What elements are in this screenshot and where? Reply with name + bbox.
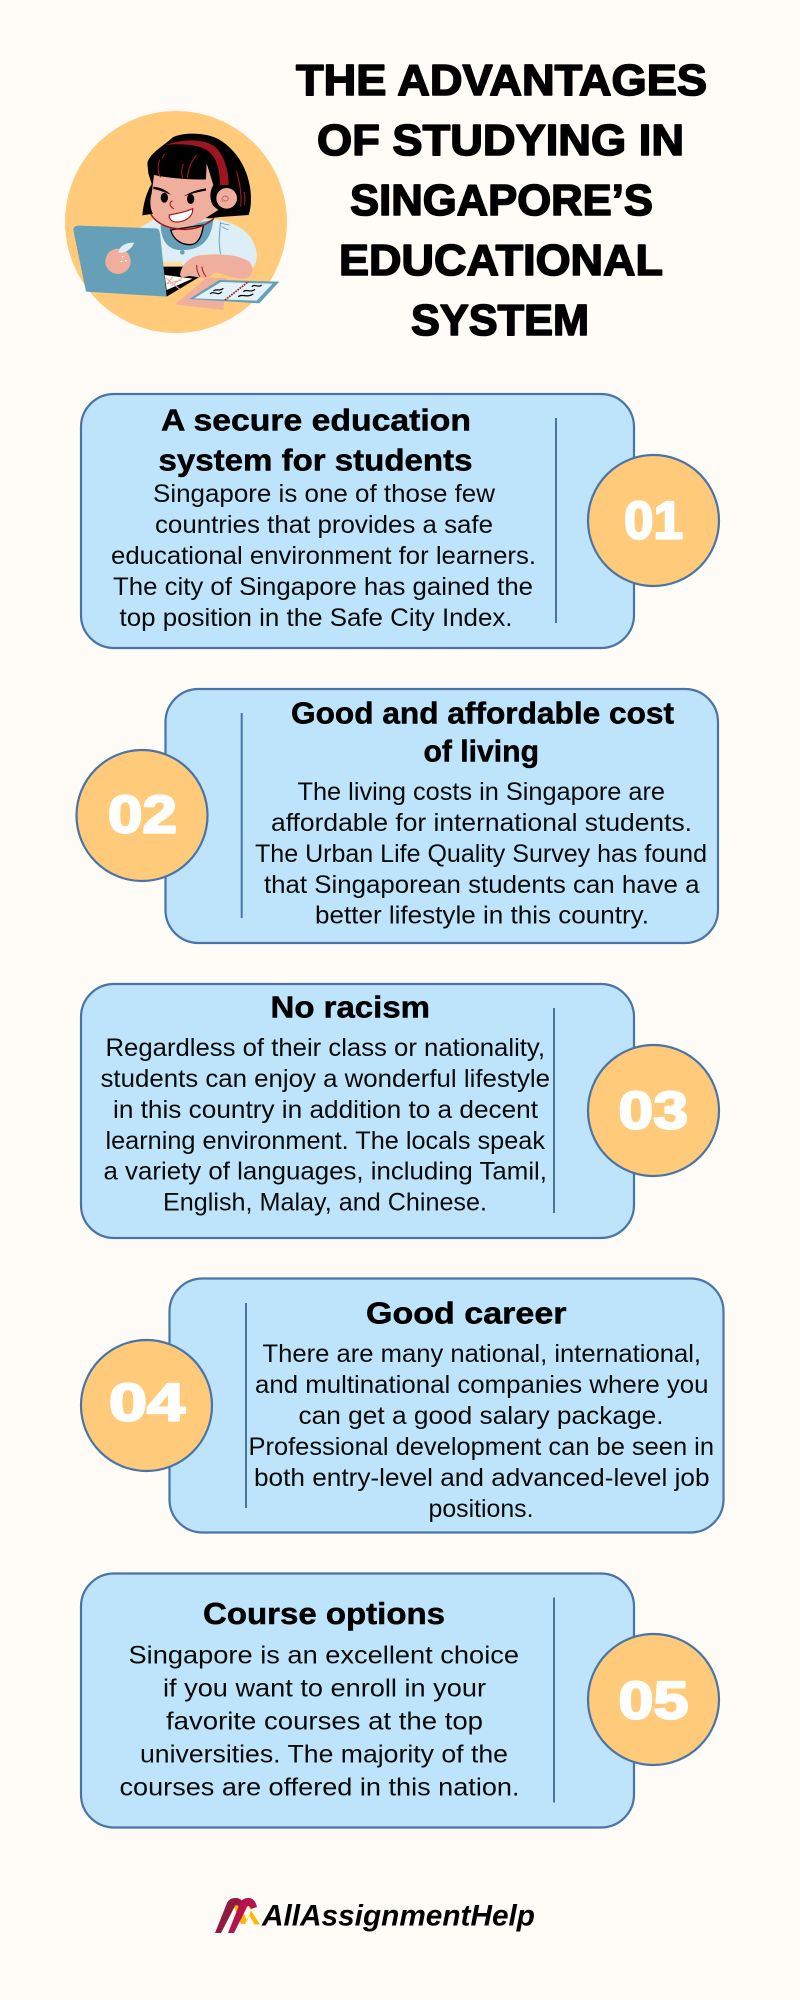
title: SYSTEM: [411, 296, 589, 345]
body text: better lifestyle in this country.: [315, 902, 649, 930]
number badge 04: 04: [109, 1374, 186, 1432]
body text: affordable for international students.: [271, 809, 692, 837]
divider line: [553, 1008, 555, 1213]
title: THE ADVANTAGES: [296, 56, 707, 105]
body text: students can enjoy a wonderful lifestyle: [100, 1065, 550, 1093]
panel: card 05: [81, 1574, 719, 1828]
body text: Professional development can be seen in: [248, 1433, 714, 1461]
logo: AllAssignmentHelp: [215, 1898, 535, 1933]
divider line: [245, 1303, 247, 1508]
body text: Singapore is one of those few: [153, 480, 496, 508]
icon: student and laptop: [73, 134, 279, 310]
heading: of living: [424, 734, 539, 768]
body text: [120, 1642, 520, 1802]
body text: [255, 778, 707, 930]
heading: A secure education: [161, 402, 471, 438]
icon: yellow circle backdrop: [65, 111, 287, 333]
panel: card 04: [81, 1278, 724, 1532]
body text: countries that provides a safe: [155, 511, 493, 539]
body text: courses are offered in this nation.: [120, 1774, 520, 1802]
body text: favorite courses at the top: [166, 1708, 483, 1736]
title: [296, 56, 707, 345]
card background: [81, 1574, 634, 1828]
number badge 03: [588, 1045, 719, 1176]
body text: a variety of languages, including Tamil,: [104, 1158, 547, 1186]
logo wordmark: AllAssignmentHelp: [261, 1900, 535, 1932]
title: OF STUDYING IN: [317, 116, 684, 165]
body text: positions.: [428, 1495, 534, 1523]
body text: both entry-level and advanced-level job: [254, 1464, 710, 1492]
body text: [111, 480, 536, 632]
body text: in this country in addition to a decent: [113, 1096, 538, 1124]
card background: [166, 689, 718, 943]
panel: card 02: [76, 689, 718, 943]
number badge 01: [588, 455, 719, 586]
number badge 04: [81, 1340, 212, 1471]
body text: educational environment for learners.: [111, 542, 536, 570]
divider line: [553, 1598, 555, 1802]
body text: can get a good salary package.: [298, 1402, 664, 1430]
number badge 02: [76, 750, 208, 881]
body text: English, Malay, and Chinese.: [163, 1188, 487, 1216]
title: SINGAPORE’S: [350, 176, 653, 225]
panel: card 03: [81, 984, 719, 1238]
body text: The Urban Life Quality Survey has found: [255, 840, 707, 868]
number badge 05: 05: [618, 1672, 688, 1730]
heading: Course options: [203, 1596, 445, 1631]
card background: [81, 394, 634, 648]
card background: [81, 984, 634, 1238]
body text: learning environment. The locals speak: [106, 1127, 545, 1155]
number badge 01: 01: [624, 492, 683, 550]
divider line: [241, 713, 243, 918]
body text: universities. The majority of the: [140, 1740, 508, 1768]
number badge 02: 02: [108, 786, 177, 844]
heading: Good career: [366, 1296, 566, 1330]
body text: [248, 1340, 714, 1523]
body text: if you want to enroll in your: [163, 1674, 486, 1702]
body text: The living costs in Singapore are: [298, 778, 665, 806]
title: EDUCATIONAL: [339, 236, 663, 285]
body text: Singapore is an excellent choice: [128, 1642, 519, 1670]
body text: Regardless of their class or nationality,: [106, 1034, 545, 1062]
icon: logo mark: [215, 1898, 260, 1933]
heading: [291, 696, 674, 768]
body text: The city of Singapore has gained the: [113, 573, 533, 601]
body text: There are many national, international,: [262, 1340, 701, 1368]
body text: and multinational companies where you: [255, 1371, 708, 1399]
card background: [170, 1278, 724, 1532]
divider line: [555, 418, 557, 623]
body text: [100, 1034, 550, 1216]
heading: system for students: [158, 442, 472, 478]
heading: Good and affordable cost: [291, 696, 674, 730]
illustration: student at laptop: [65, 111, 287, 333]
heading: [158, 402, 472, 478]
body text: top position in the Safe City Index.: [120, 604, 512, 632]
heading: No racism: [270, 990, 430, 1024]
number badge 03: 03: [618, 1082, 688, 1140]
body text: that Singaporean students can have a: [264, 871, 700, 899]
panel: card 01: [81, 394, 719, 648]
number badge 05: [588, 1634, 719, 1765]
